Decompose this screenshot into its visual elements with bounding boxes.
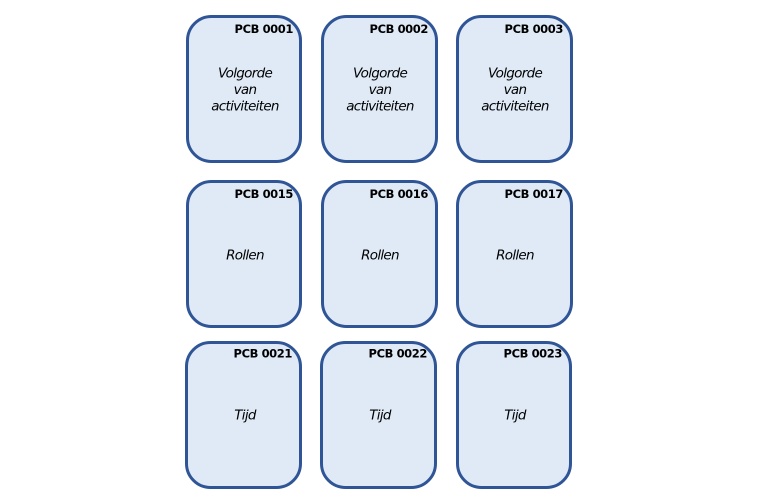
card: PCB 0023 — [458, 342, 570, 488]
card: PCB 0001: Volgorde — [218, 66, 272, 82]
card: PCB 0003 — [458, 16, 572, 162]
card: PCB 0003: van — [504, 82, 527, 98]
card: PCB 0001 — [188, 16, 300, 162]
card: PCB 0002: van — [369, 82, 392, 98]
card: PCB 0016 — [322, 182, 436, 326]
card: PCB 0001: van — [234, 82, 257, 98]
card: PCB 0016: PCB 0016 — [370, 187, 428, 201]
card: PCB 0021: Tijd — [234, 408, 257, 424]
card: PCB 0021 — [186, 342, 300, 488]
card: PCB 0017: PCB 0017 — [505, 187, 563, 201]
card: PCB 0003: activiteiten — [481, 98, 549, 114]
card: PCB 0022: Tijd — [369, 408, 392, 424]
card: PCB 0015: PCB 0015 — [235, 187, 293, 201]
card: PCB 0003: PCB 0003 — [505, 22, 563, 36]
card: PCB 0002: PCB 0002 — [370, 22, 428, 36]
card: PCB 0023: Tijd — [504, 408, 527, 424]
card: PCB 0021: PCB 0021 — [234, 346, 292, 360]
card: PCB 0016: Rollen — [361, 248, 399, 264]
card: PCB 0017 — [458, 182, 572, 326]
card: PCB 0022 — [322, 342, 436, 488]
card: PCB 0001: activiteiten — [211, 98, 279, 114]
card: PCB 0002: Volgorde — [353, 66, 407, 82]
card: PCB 0023: PCB 0023 — [504, 346, 562, 360]
card: PCB 0001: PCB 0001 — [235, 22, 293, 36]
card: PCB 0015 — [188, 182, 300, 326]
card: PCB 0017: Rollen — [496, 248, 534, 264]
card: PCB 0002 — [322, 16, 436, 162]
card: PCB 0015: Rollen — [226, 248, 264, 264]
card: PCB 0002: activiteiten — [346, 98, 414, 114]
card: PCB 0022: PCB 0022 — [369, 346, 427, 360]
card: PCB 0003: Volgorde — [488, 66, 542, 82]
